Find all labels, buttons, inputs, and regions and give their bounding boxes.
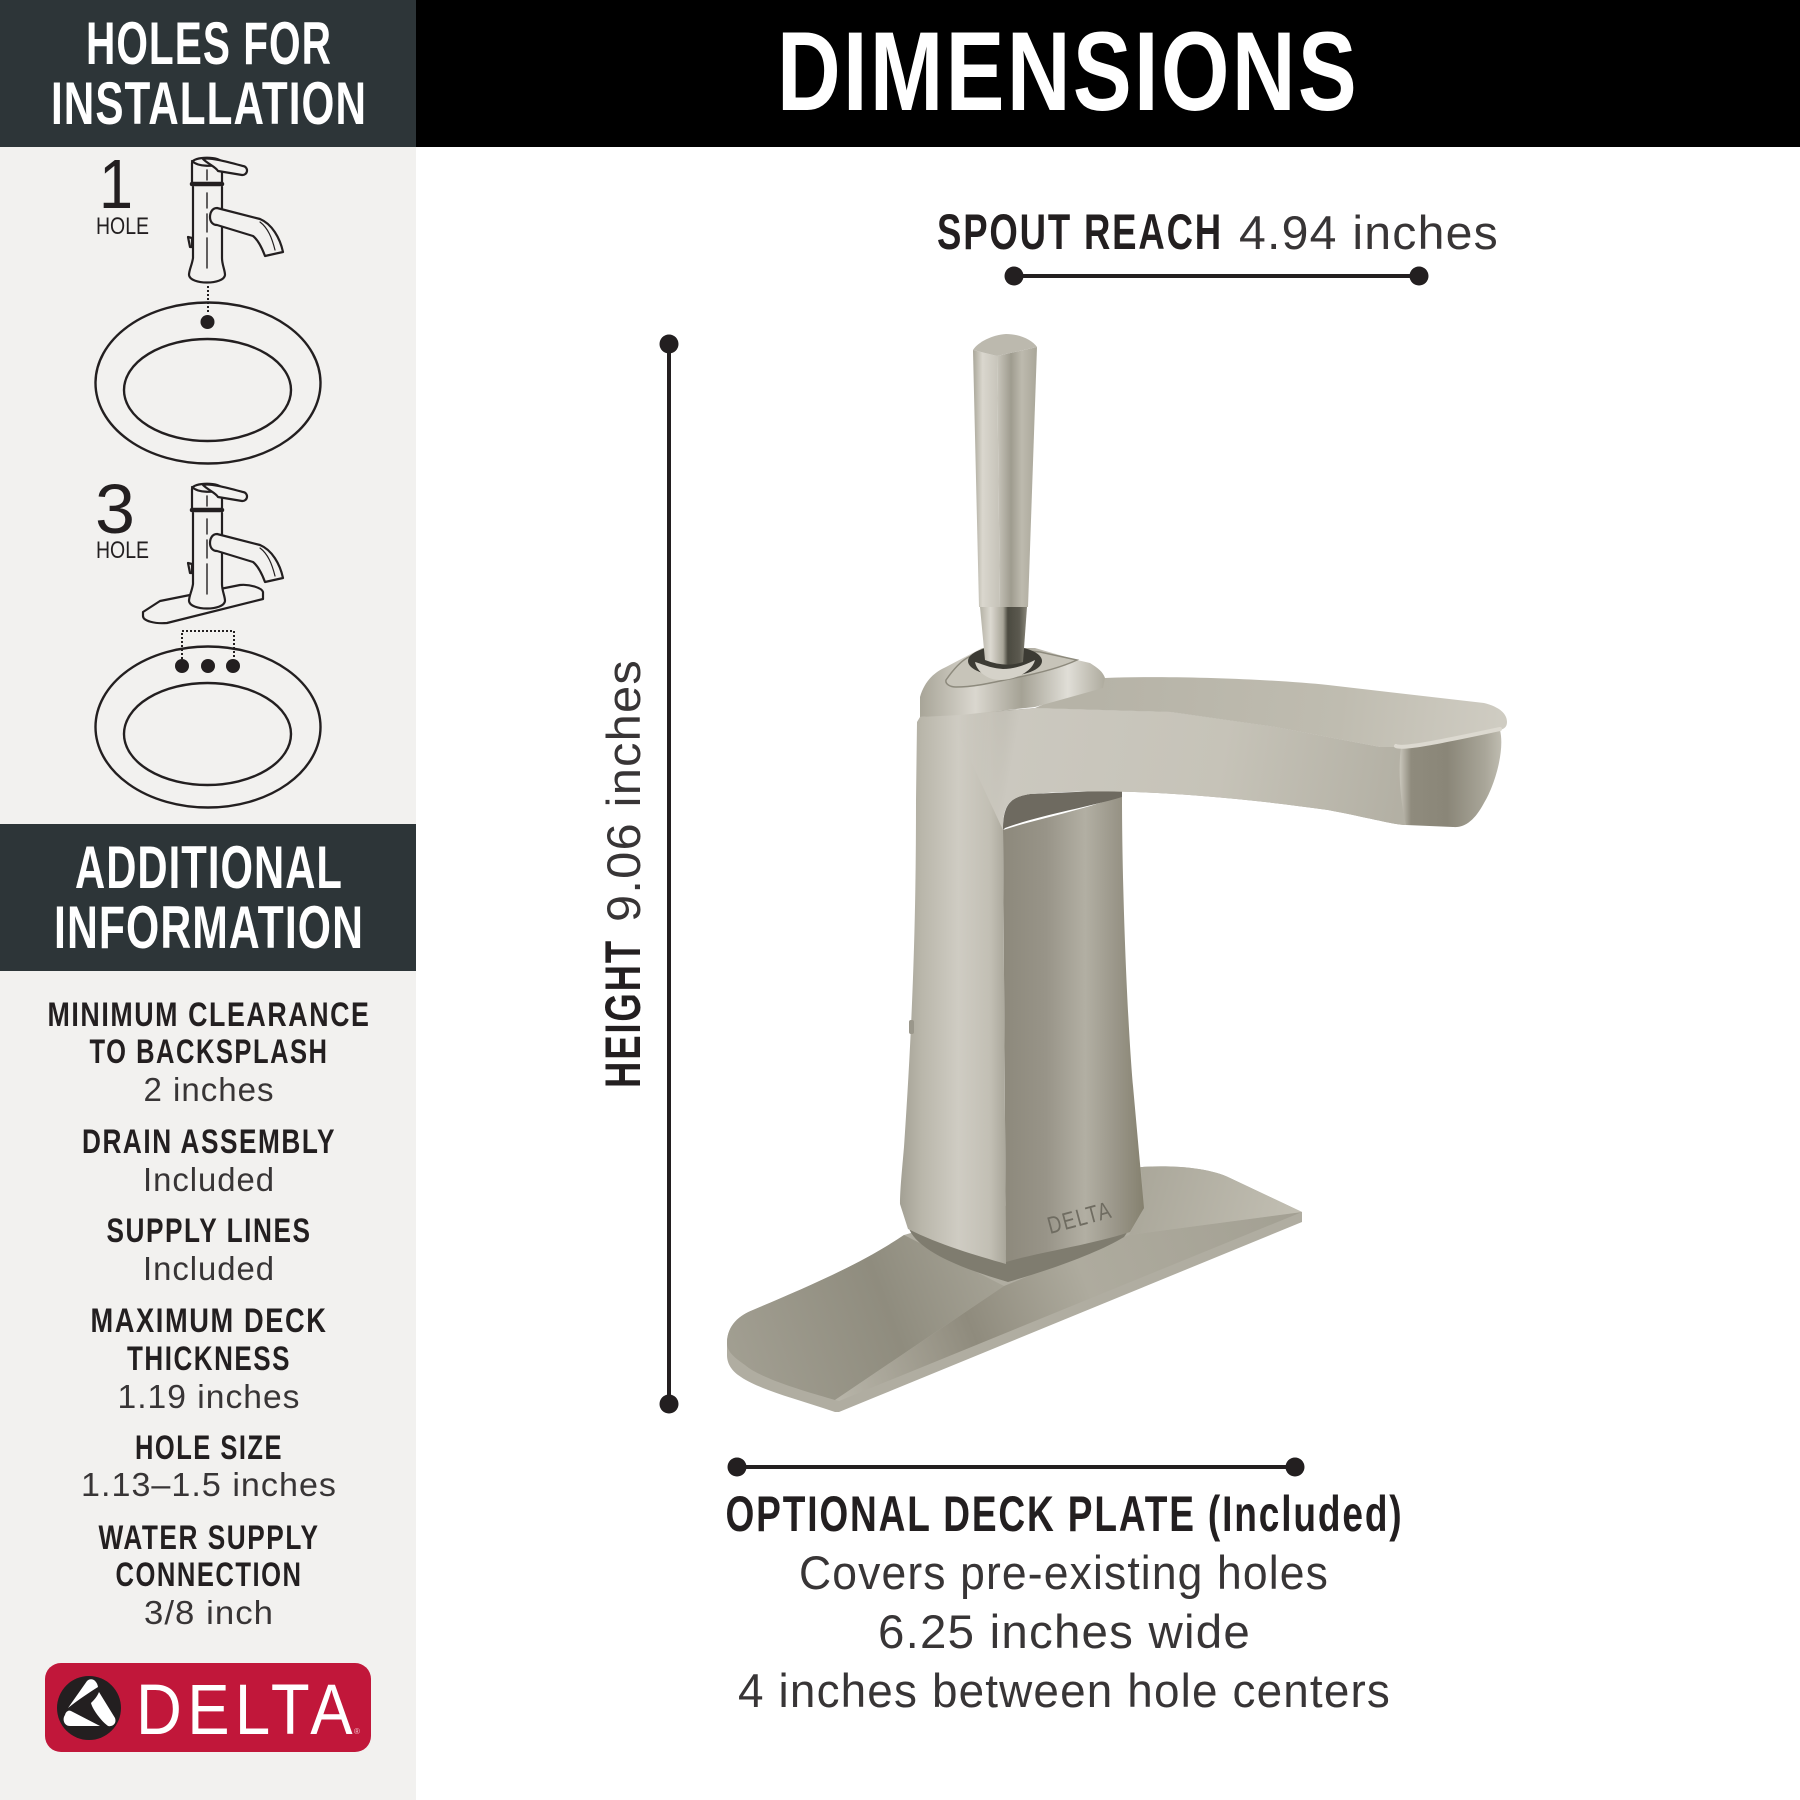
text block: water supply connection: CONNECTION <box>116 1556 302 1594</box>
heading: dimensions banner: DIMENSIONS <box>777 9 1359 134</box>
text block: maximum deck thickness: THICKNESS <box>127 1340 291 1378</box>
heading: additional information <box>0 824 416 971</box>
faucet deck plate <box>727 1166 1302 1412</box>
dimension: optional deck plate: Covers pre-existing holes <box>799 1546 1329 1599</box>
text block: drain assembly <box>82 1123 336 1199</box>
heading: holes for installation: HOLES FOR <box>86 10 332 77</box>
faucet handle <box>973 334 1037 665</box>
faucet drain lift knob <box>909 1020 914 1034</box>
text block: minimum clearance: MINIMUM CLEARANCE <box>48 996 370 1034</box>
heading: additional information: ADDITIONAL <box>75 834 343 901</box>
illustration: brushed nickel faucet <box>727 334 1507 1412</box>
text block: supply lines: SUPPLY LINES <box>106 1212 312 1250</box>
dimension: optional deck plate: 6.25 inches wide <box>878 1605 1251 1658</box>
faucet spout end <box>1400 730 1501 827</box>
text block: minimum clearance: 2 inches <box>144 1072 274 1109</box>
faucet spout top <box>1035 677 1507 747</box>
faucet handle socket <box>968 646 1042 676</box>
text block: supply lines: Included <box>143 1251 275 1288</box>
faucet underside shadow <box>1003 790 1122 830</box>
text block: drain assembly: DRAIN ASSEMBLY <box>82 1123 336 1161</box>
dimension: optional deck plate: 4 inches between hole centers <box>738 1664 1391 1717</box>
icon: one hole installation: HOLE <box>96 213 149 240</box>
faucet spout front panel <box>950 708 1406 830</box>
logo: delta: DELTA <box>136 1671 358 1750</box>
icon: one hole installation: 1 <box>99 145 133 223</box>
text block: drain assembly: Included <box>143 1162 275 1199</box>
heading: additional information: INFORMATION <box>54 894 364 961</box>
panel: left sidebar <box>0 147 416 1800</box>
text block: hole size <box>81 1429 337 1504</box>
dimension: height: HEIGHT <box>595 939 651 1088</box>
icon: three hole installation: HOLE <box>96 537 149 564</box>
text block: water supply connection: 3/8 inch <box>144 1595 274 1632</box>
logo: delta: ® <box>354 1727 360 1736</box>
icon: one hole installation <box>96 145 320 464</box>
text block: water supply connection <box>98 1519 320 1632</box>
faucet body chamfer <box>908 1208 1144 1282</box>
faucet engraved brand: DELTA <box>1045 1197 1115 1240</box>
faucet collar pad <box>946 648 1077 687</box>
text block: supply lines <box>106 1212 312 1288</box>
dimension: optional deck plate: OPTIONAL DECK PLATE (Included) <box>726 1486 1404 1542</box>
dimension: spout reach: SPOUT REACH <box>937 204 1223 260</box>
text block: minimum clearance <box>48 996 370 1109</box>
faucet handle ball ring <box>975 660 1035 680</box>
dimension: spout reach: 4.94 inches <box>1239 206 1499 259</box>
icon: three hole installation: 3 <box>95 470 135 548</box>
text block: minimum clearance: TO BACKSPLASH <box>90 1033 328 1071</box>
text block: maximum deck thickness: MAXIMUM DECK <box>90 1302 328 1340</box>
faucet body front and spout face <box>900 708 1406 1264</box>
heading: holes for installation: INSTALLATION <box>51 70 367 137</box>
logo: delta <box>45 1663 371 1752</box>
heading: dimensions banner <box>416 0 1800 147</box>
dimension: height <box>595 334 678 1414</box>
text block: maximum deck thickness: 1.19 inches <box>118 1379 300 1416</box>
dimension: height: 9.06 inches <box>597 659 650 922</box>
text block: hole size: 1.13–1.5 inches <box>81 1467 337 1504</box>
heading: holes for installation <box>0 0 416 147</box>
dimension: spout reach <box>937 204 1499 286</box>
icon: three hole installation <box>95 470 320 808</box>
faucet body back face <box>1003 795 1144 1262</box>
text block: maximum deck thickness <box>90 1302 328 1416</box>
faucet spout end highlight <box>1396 729 1500 747</box>
text block: water supply connection: WATER SUPPLY <box>98 1519 320 1557</box>
faucet collar <box>920 648 1105 717</box>
dimension: optional deck plate <box>726 1458 1404 1717</box>
text block: hole size: HOLE SIZE <box>135 1429 283 1467</box>
